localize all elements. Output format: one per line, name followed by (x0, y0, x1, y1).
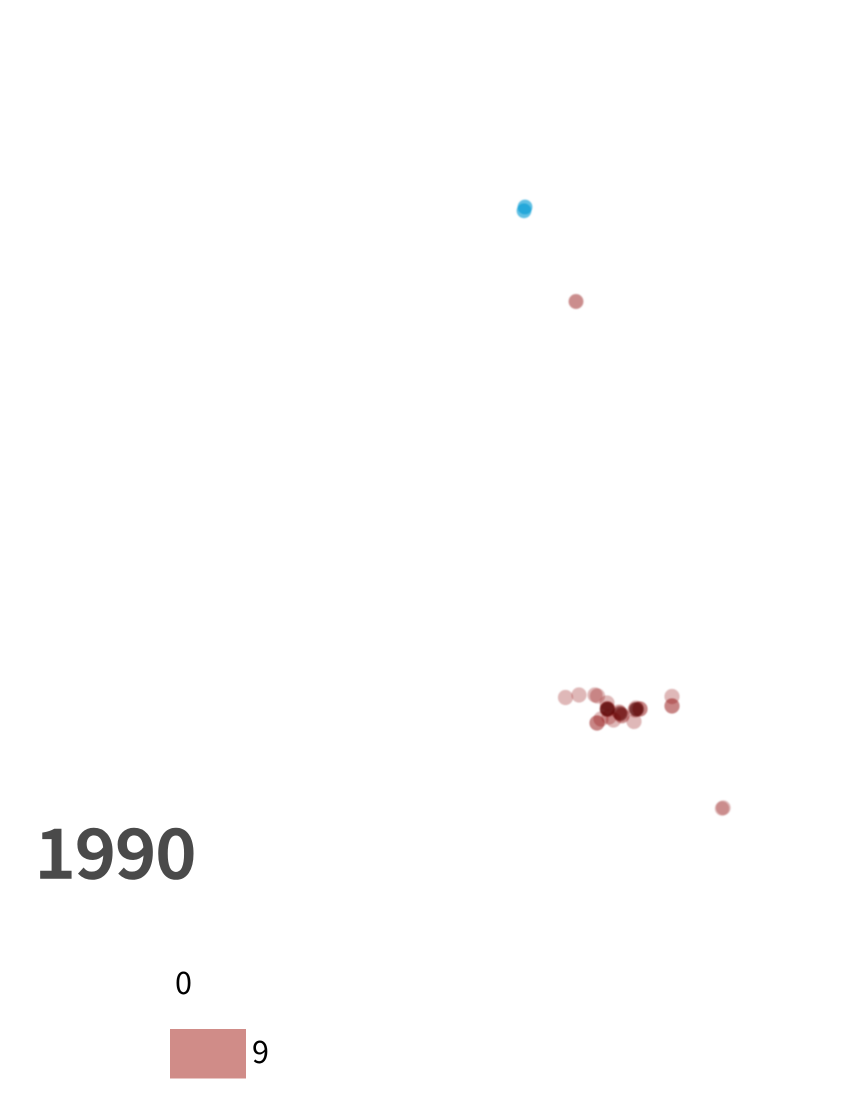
legend label: nine: 9 (252, 1027, 269, 1072)
blue map points (517, 200, 532, 218)
red map point: northern location (568, 294, 584, 309)
legend label: zero: 0 (175, 958, 192, 1003)
legend swatch (170, 1029, 246, 1078)
red map points: central cluster (558, 687, 680, 731)
red map point: southern location (715, 800, 731, 816)
legend (170, 958, 269, 1078)
year label: 1990 (35, 799, 196, 898)
dark overlap core (600, 702, 644, 721)
